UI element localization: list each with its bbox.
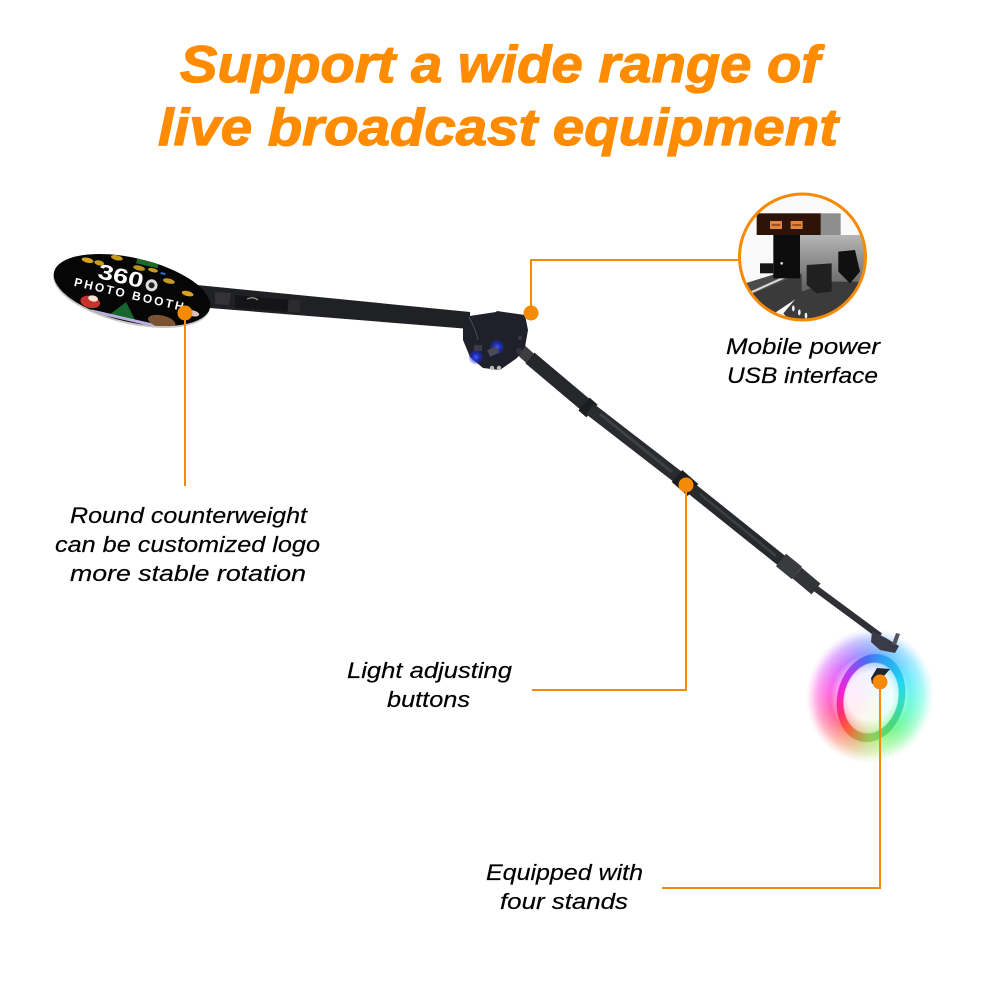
callout: four stands [662, 674, 888, 888]
callout: round counterweight [178, 306, 192, 486]
lower telescopic arm [512, 342, 880, 636]
caption: light buttons: buttons [387, 687, 470, 712]
round counterweight: PHOTO BOOTH [73, 275, 185, 314]
callout: light buttons [532, 478, 694, 690]
title: Support a wide range of [180, 36, 825, 94]
caption: stands: Equipped with [486, 860, 643, 885]
caption: light buttons: Light adjusting [347, 658, 513, 683]
caption: stands [486, 860, 643, 914]
caption: stands: four stands [500, 889, 628, 914]
title: live broadcast equipment [158, 99, 841, 157]
hub with blue lights [463, 311, 528, 370]
callout: USB interface [524, 260, 739, 320]
caption: USB: Mobile power [726, 334, 882, 359]
counterweight logo text: 360 [96, 260, 146, 293]
caption: light buttons [347, 658, 513, 712]
title [158, 36, 841, 157]
caption: counterweight [55, 503, 320, 586]
caption: counterweight: can be customized logo [55, 532, 320, 557]
ring light [836, 654, 906, 742]
caption: counterweight: more stable rotation [70, 561, 306, 586]
inset photo: USB interface [735, 190, 870, 325]
ring light glow [808, 630, 932, 762]
counterweight graphics [80, 255, 200, 326]
upper boom arm [197, 285, 470, 329]
caption: USB: USB interface [727, 363, 878, 388]
caption: counterweight: Round counterweight [70, 503, 309, 528]
caption: USB [726, 334, 882, 388]
ring light clamp [871, 631, 900, 684]
round counterweight [53, 254, 210, 328]
